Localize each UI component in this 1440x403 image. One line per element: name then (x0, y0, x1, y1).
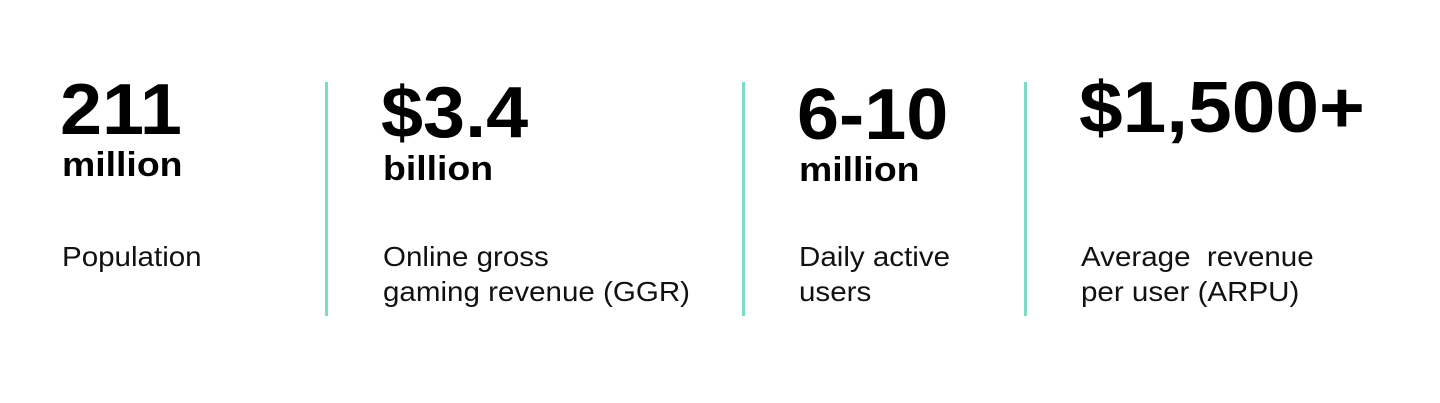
label: ARPU: Average revenue (1081, 241, 1314, 272)
unit: million: million (62, 146, 183, 184)
unit: million: million (799, 151, 920, 189)
divider 3 (1024, 82, 1027, 316)
label: daily active users: Daily active (799, 241, 950, 272)
divider 1 (325, 82, 328, 316)
panel: population (60, 70, 202, 272)
panel: ARPU (1079, 68, 1365, 307)
number: $3.4: $3.4 (381, 73, 528, 153)
label: population: Population (62, 241, 202, 272)
label: daily active users: users (799, 276, 871, 307)
number: 6-10: 6-10 (797, 75, 948, 155)
number: 211: 211 (60, 70, 182, 150)
label: ARPU: per user (ARPU) (1081, 276, 1299, 307)
label: ARPU (1081, 241, 1314, 307)
unit: billion: billion (383, 150, 493, 188)
panel: GGR (381, 73, 690, 307)
number: $1,500+: $1,500+ (1079, 68, 1365, 148)
label: daily active users (799, 241, 950, 307)
label: GGR: gaming revenue (GGR) (383, 276, 690, 307)
panel: daily active users (797, 75, 950, 307)
divider 2 (742, 82, 745, 316)
label: GGR (383, 241, 690, 307)
label: GGR: Online gross (383, 241, 549, 272)
